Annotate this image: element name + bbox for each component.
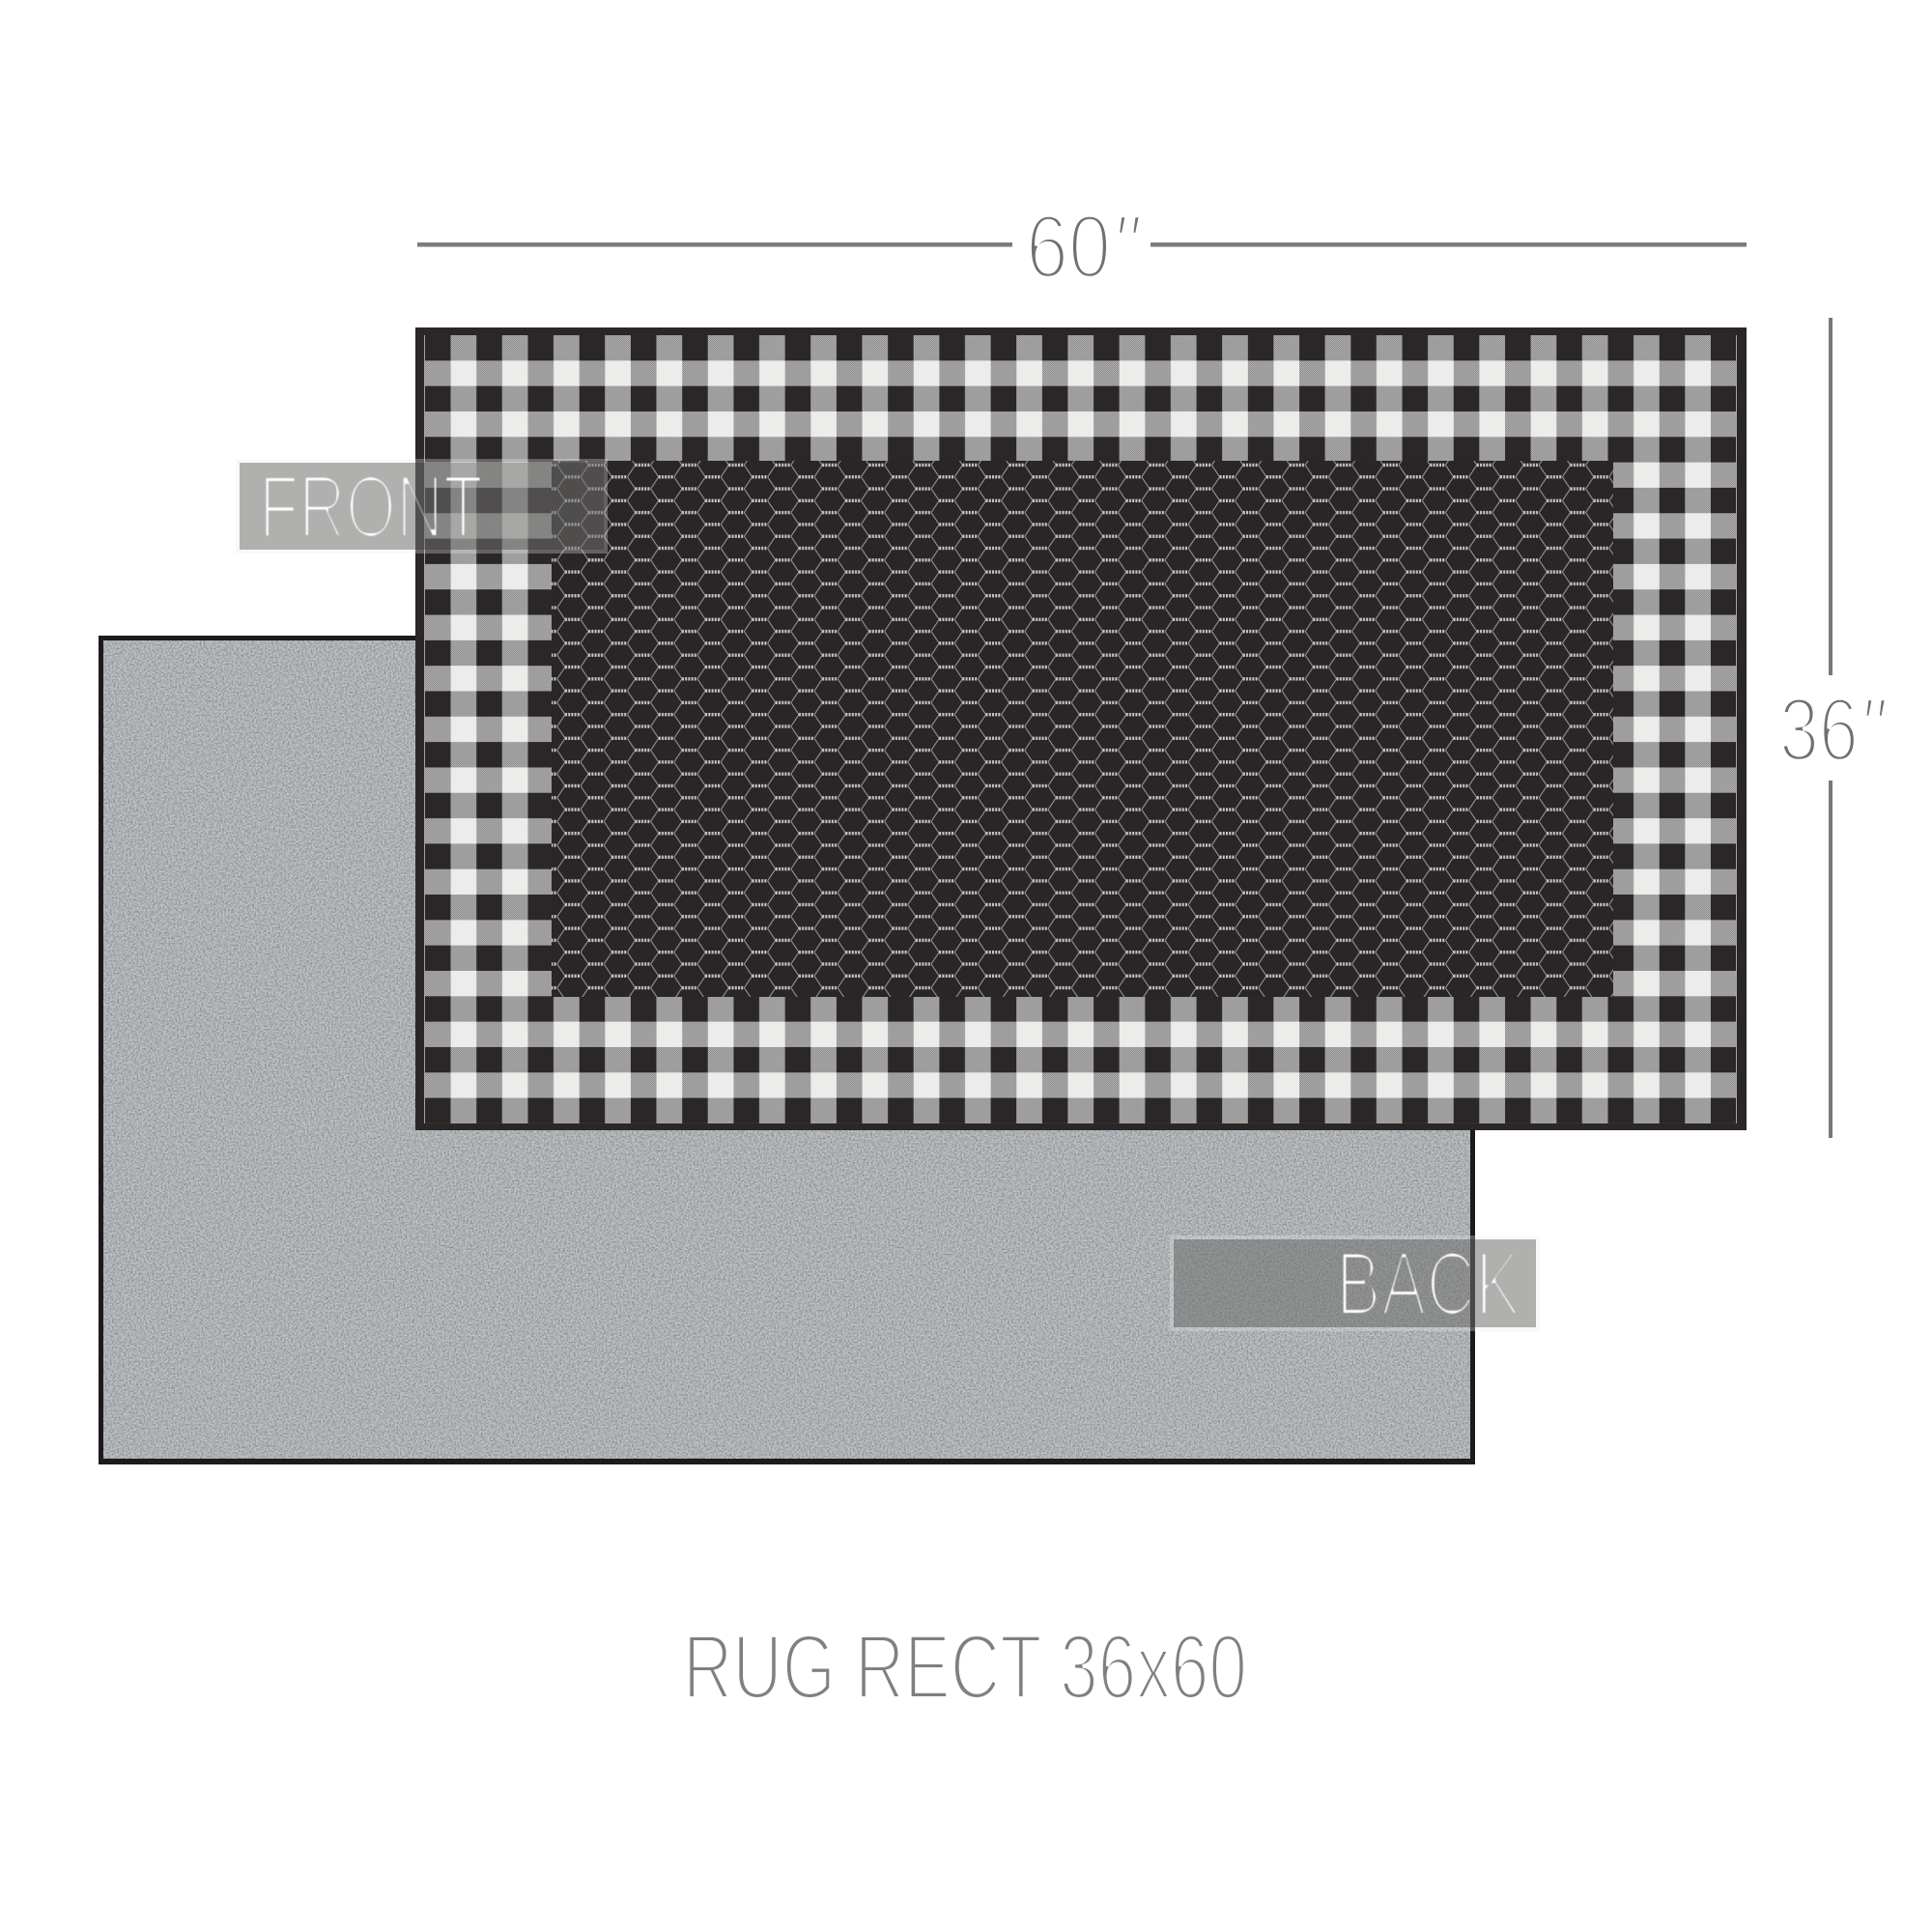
chicken wire centre field <box>552 461 1613 997</box>
label: BACK: BACK <box>1336 1233 1520 1334</box>
gingham check border <box>425 335 1736 1123</box>
panel: back of rug <box>99 636 1475 1464</box>
label: BACK <box>1172 1233 1538 1334</box>
dimension: width 60 inches <box>417 196 1747 297</box>
rug edge binding <box>415 327 1747 1130</box>
caption: RUG RECT 36x60 <box>683 1616 1247 1719</box>
dimension: height 36 inches: 36" <box>1779 679 1887 780</box>
label: FRONT: FRONT <box>259 458 483 556</box>
dimension: width 60 inches: 60" <box>1026 196 1141 297</box>
dimension: height 36 inches <box>1779 318 1887 1138</box>
panel: front of rug <box>415 327 1747 1130</box>
